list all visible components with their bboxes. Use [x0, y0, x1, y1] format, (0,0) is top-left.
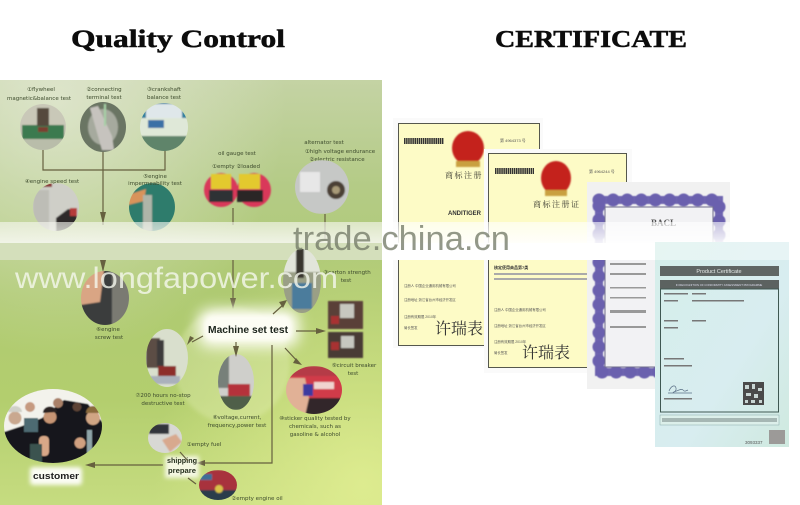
shipping prepare group: shipping [167, 458, 197, 465]
red gauge backgrounds [204, 173, 271, 207]
caption: voltage: frequency,power test [208, 423, 267, 429]
photo: empty engine oil [199, 470, 237, 500]
caption: voltage [208, 415, 267, 429]
captions: top tests: ③crankshaft [147, 87, 182, 93]
certificate: trademark 2: 第 4964244 号 [589, 168, 615, 174]
photo: engine speed test [32, 183, 80, 233]
arrow heads below band [100, 260, 236, 309]
certificate: product certificate [655, 242, 789, 447]
certificate: trademark 2: 核定使用商品第7类 [494, 264, 528, 270]
caption: engine screw test: ⑥engine [96, 327, 120, 333]
captions: top tests: impermeability test [128, 181, 183, 187]
certificate: trademark 1: 许瑞表 [435, 316, 483, 339]
certificate: trademark 1: 注册人 中国企业通用机械有限公司 [404, 283, 456, 288]
captions: top tests [7, 86, 183, 187]
certificate: trademark 2: 局长签发 [494, 350, 508, 355]
shipping prepare group: ②empty engine oil [231, 495, 283, 502]
heading: CERTIFICATE: CERTIFICATE [495, 27, 687, 53]
certificate: trademark 1: 商标注册 [445, 170, 483, 180]
caption: sticker quality [279, 415, 351, 438]
alternator test group: ①high voltage endurance [305, 149, 376, 155]
certificate: trademark 2: 注册人 中国企业通用机械有限公司 [494, 307, 546, 312]
certificate: trademark 1: 局长签发 [404, 325, 418, 330]
photo: flywheel test [20, 104, 66, 150]
shipping prepare group: ①empty fuel [187, 442, 222, 448]
watermark band on panel [0, 222, 382, 260]
header bar [660, 266, 779, 276]
caption: carton strength: test [341, 278, 352, 284]
alternator test group: alternator test [304, 140, 345, 146]
QR code [743, 382, 764, 405]
watermark: trade.china.cn: trade.china.cn [293, 220, 510, 258]
center glow: machine set test [174, 307, 299, 423]
alternator test group [294, 140, 376, 240]
caption: circuit breaker: test [348, 371, 359, 377]
caption: circuit breaker [332, 362, 377, 377]
photo: customer group [3, 388, 105, 464]
photo: engine impermeability test [128, 183, 176, 233]
captions: top tests: ①flywheel [27, 87, 55, 93]
photo: 200 hours destructive test [145, 328, 189, 388]
certificate: trademark 2: 注册地址 浙江省台州市经济开发区 [494, 323, 546, 328]
certificate: product certificate: Product Certificate [696, 269, 742, 275]
photo: connecting terminal test [80, 102, 126, 152]
caption: circuit breaker: ⑨circuit breaker [332, 362, 377, 369]
panel: quality control flow [0, 80, 382, 505]
certificate: trademark 2 [484, 149, 632, 373]
certificate: trademark 1: 注册有效期限 2010年 [404, 314, 437, 319]
emblem [541, 161, 571, 196]
certificate: trademark 2: 注册有效期限 2010年 [494, 339, 527, 344]
captions: top tests: ④engine speed test [25, 179, 80, 185]
captions: top tests: ②connecting [86, 86, 122, 93]
certificate: trademark 1: ANDITIGER [448, 211, 482, 217]
certificate: purple border: BACL [651, 218, 676, 228]
oil gauge test group: ①empty ②loaded [212, 163, 260, 170]
signature [668, 386, 692, 393]
stamp [769, 430, 785, 444]
captions: top tests: balance test [147, 95, 182, 101]
connector lines: top tests to screw test [43, 150, 165, 225]
caption: 200 hours [135, 392, 191, 407]
shipping prepare group [165, 442, 283, 502]
caption: sticker quality: gasoline & alcohol [290, 432, 341, 438]
barcode [404, 138, 444, 144]
caption: 200 hours: ⑦200 hours no-stop [135, 392, 191, 399]
certificate: trademark 1 [393, 118, 543, 348]
photo: empty fuel [148, 423, 182, 453]
certificate: purple border [587, 182, 730, 389]
certificate: trademark 1: 注册地址 浙江省台州市经济开发区 [404, 297, 456, 302]
arrows from machine set test [187, 300, 326, 466]
caption: voltage: ⑧voltage,current, [213, 415, 262, 421]
label: Machine set test: Machine set test [208, 324, 288, 336]
caption: carton strength: ③carton strength [323, 270, 371, 276]
certificate: trademark 1: 第 4964373 号 [500, 137, 526, 143]
label: customer [30, 467, 82, 485]
photo: engine screw test [80, 270, 130, 326]
emblem [452, 131, 484, 167]
caption: sticker quality: ⑩sticker quality tested by [279, 415, 351, 422]
captions: top tests: terminal test [86, 95, 122, 101]
captions: top tests: magnetic&balance test [7, 96, 72, 102]
caption: engine screw test [95, 327, 124, 341]
caption: sticker quality: chemicals, such as [289, 424, 341, 430]
barcode [495, 168, 534, 174]
photo: sticker test [286, 366, 342, 414]
oil gauge test group [204, 151, 271, 225]
certificate: trademark 2: 商标注册证 [533, 199, 580, 209]
alternator test group: ②electric resistance [309, 156, 365, 163]
photos: circuit breaker test [328, 301, 363, 358]
oil gauge test group: oil gauge test [218, 151, 257, 157]
caption: carton strength [323, 270, 371, 284]
certificate: trademark 2: 许瑞表 [522, 340, 570, 363]
arrow: shipping to customer [85, 462, 163, 468]
captions: top tests: ⑤engine [143, 174, 167, 180]
heading: Quality Control: Quality Control [71, 26, 285, 53]
photo: voltage test [217, 354, 255, 410]
certificate: product certificate: 3093337 [745, 440, 763, 445]
caption: 200 hours: destructive test [141, 401, 185, 407]
caption: engine screw test: screw test [95, 335, 124, 341]
shipping prepare group: prepare [168, 468, 196, 475]
photo: crankshaft balance test [140, 103, 188, 151]
watermark: www.longfapower.com: www.longfapower.com [14, 262, 338, 295]
certificate: product certificate: IN RECOGNITION OF CONFORMITY ASSESSMENT PROGRAMME [676, 283, 762, 287]
photo: carton strength test [283, 249, 321, 313]
label: customer: customer [33, 471, 79, 482]
watermark band on certificates [382, 222, 800, 260]
